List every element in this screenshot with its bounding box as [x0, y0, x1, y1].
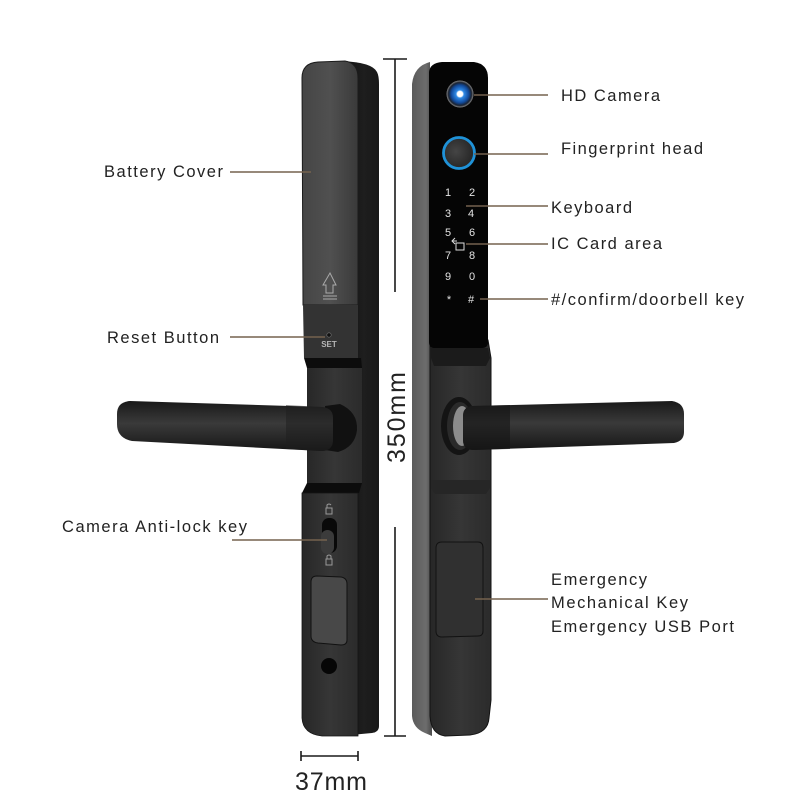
label: keyboard: Keyboard — [551, 199, 632, 217]
plate shadow bands — [431, 348, 490, 494]
keypad digits: 9 — [445, 271, 451, 283]
label: camera anti-lock key: Camera Anti-lock key — [62, 518, 248, 536]
camera lens — [446, 80, 474, 108]
keypad digits: 8 — [469, 250, 475, 262]
left lock body (back view) — [302, 61, 379, 736]
keypad digits: * — [447, 294, 452, 306]
anti-lock slider — [321, 518, 337, 554]
label: emergency key and usb port — [551, 571, 734, 636]
emergency cover — [311, 576, 347, 645]
icon: locked padlock — [326, 555, 332, 565]
side edge — [412, 62, 432, 736]
left handle — [117, 401, 357, 452]
keypad digits: # — [468, 294, 475, 306]
label: emergency key and usb port: Emergency USB Port — [551, 618, 734, 636]
keypad digits — [445, 187, 475, 306]
width label: 37mm — [295, 768, 367, 796]
label: ic card area: IC Card area — [551, 235, 663, 253]
front plate — [430, 340, 491, 736]
fingerprint reader — [444, 138, 474, 168]
keypad digits: 5 — [445, 227, 451, 239]
icon: upward arrow with bars — [323, 273, 337, 299]
width dimension line — [301, 751, 358, 761]
label: hd camera: HD Camera — [561, 87, 661, 105]
label: emergency key and usb port: Emergency — [551, 571, 648, 589]
black keypad panel — [429, 62, 488, 348]
label: fingerprint head: Fingerprint head — [561, 140, 703, 158]
label: emergency key and usb port: Mechanical Key — [551, 594, 689, 612]
keypad digits: 7 — [445, 250, 451, 262]
icon: unlocked padlock — [326, 504, 332, 514]
middle plate with upper and lower steps — [302, 358, 362, 493]
usb cover — [436, 542, 483, 637]
keypad digits: 0 — [469, 271, 475, 283]
label: reset button: Reset Button — [107, 329, 219, 347]
reset button section — [303, 305, 358, 358]
keypad digits: 4 — [468, 208, 474, 220]
icon: card symbol — [452, 238, 464, 250]
lower plate — [302, 493, 358, 736]
label: confirm and doorbell key: #/confirm/doorbell key — [551, 291, 745, 309]
battery cover panel — [302, 61, 358, 305]
leader lines — [230, 95, 548, 599]
right lock body (front view) — [412, 62, 491, 736]
keypad digits: 3 — [445, 208, 451, 220]
height dimension line — [383, 59, 407, 736]
keypad digits: 1 — [445, 187, 451, 199]
keypad digits: 6 — [469, 227, 475, 239]
side edge — [340, 61, 379, 736]
label: battery cover: Battery Cover — [104, 163, 224, 181]
keypad digits: 2 — [469, 187, 475, 199]
key hole — [321, 658, 337, 674]
reset button section: SET — [321, 340, 337, 349]
right handle — [441, 397, 684, 455]
height label: 350mm — [383, 372, 411, 463]
